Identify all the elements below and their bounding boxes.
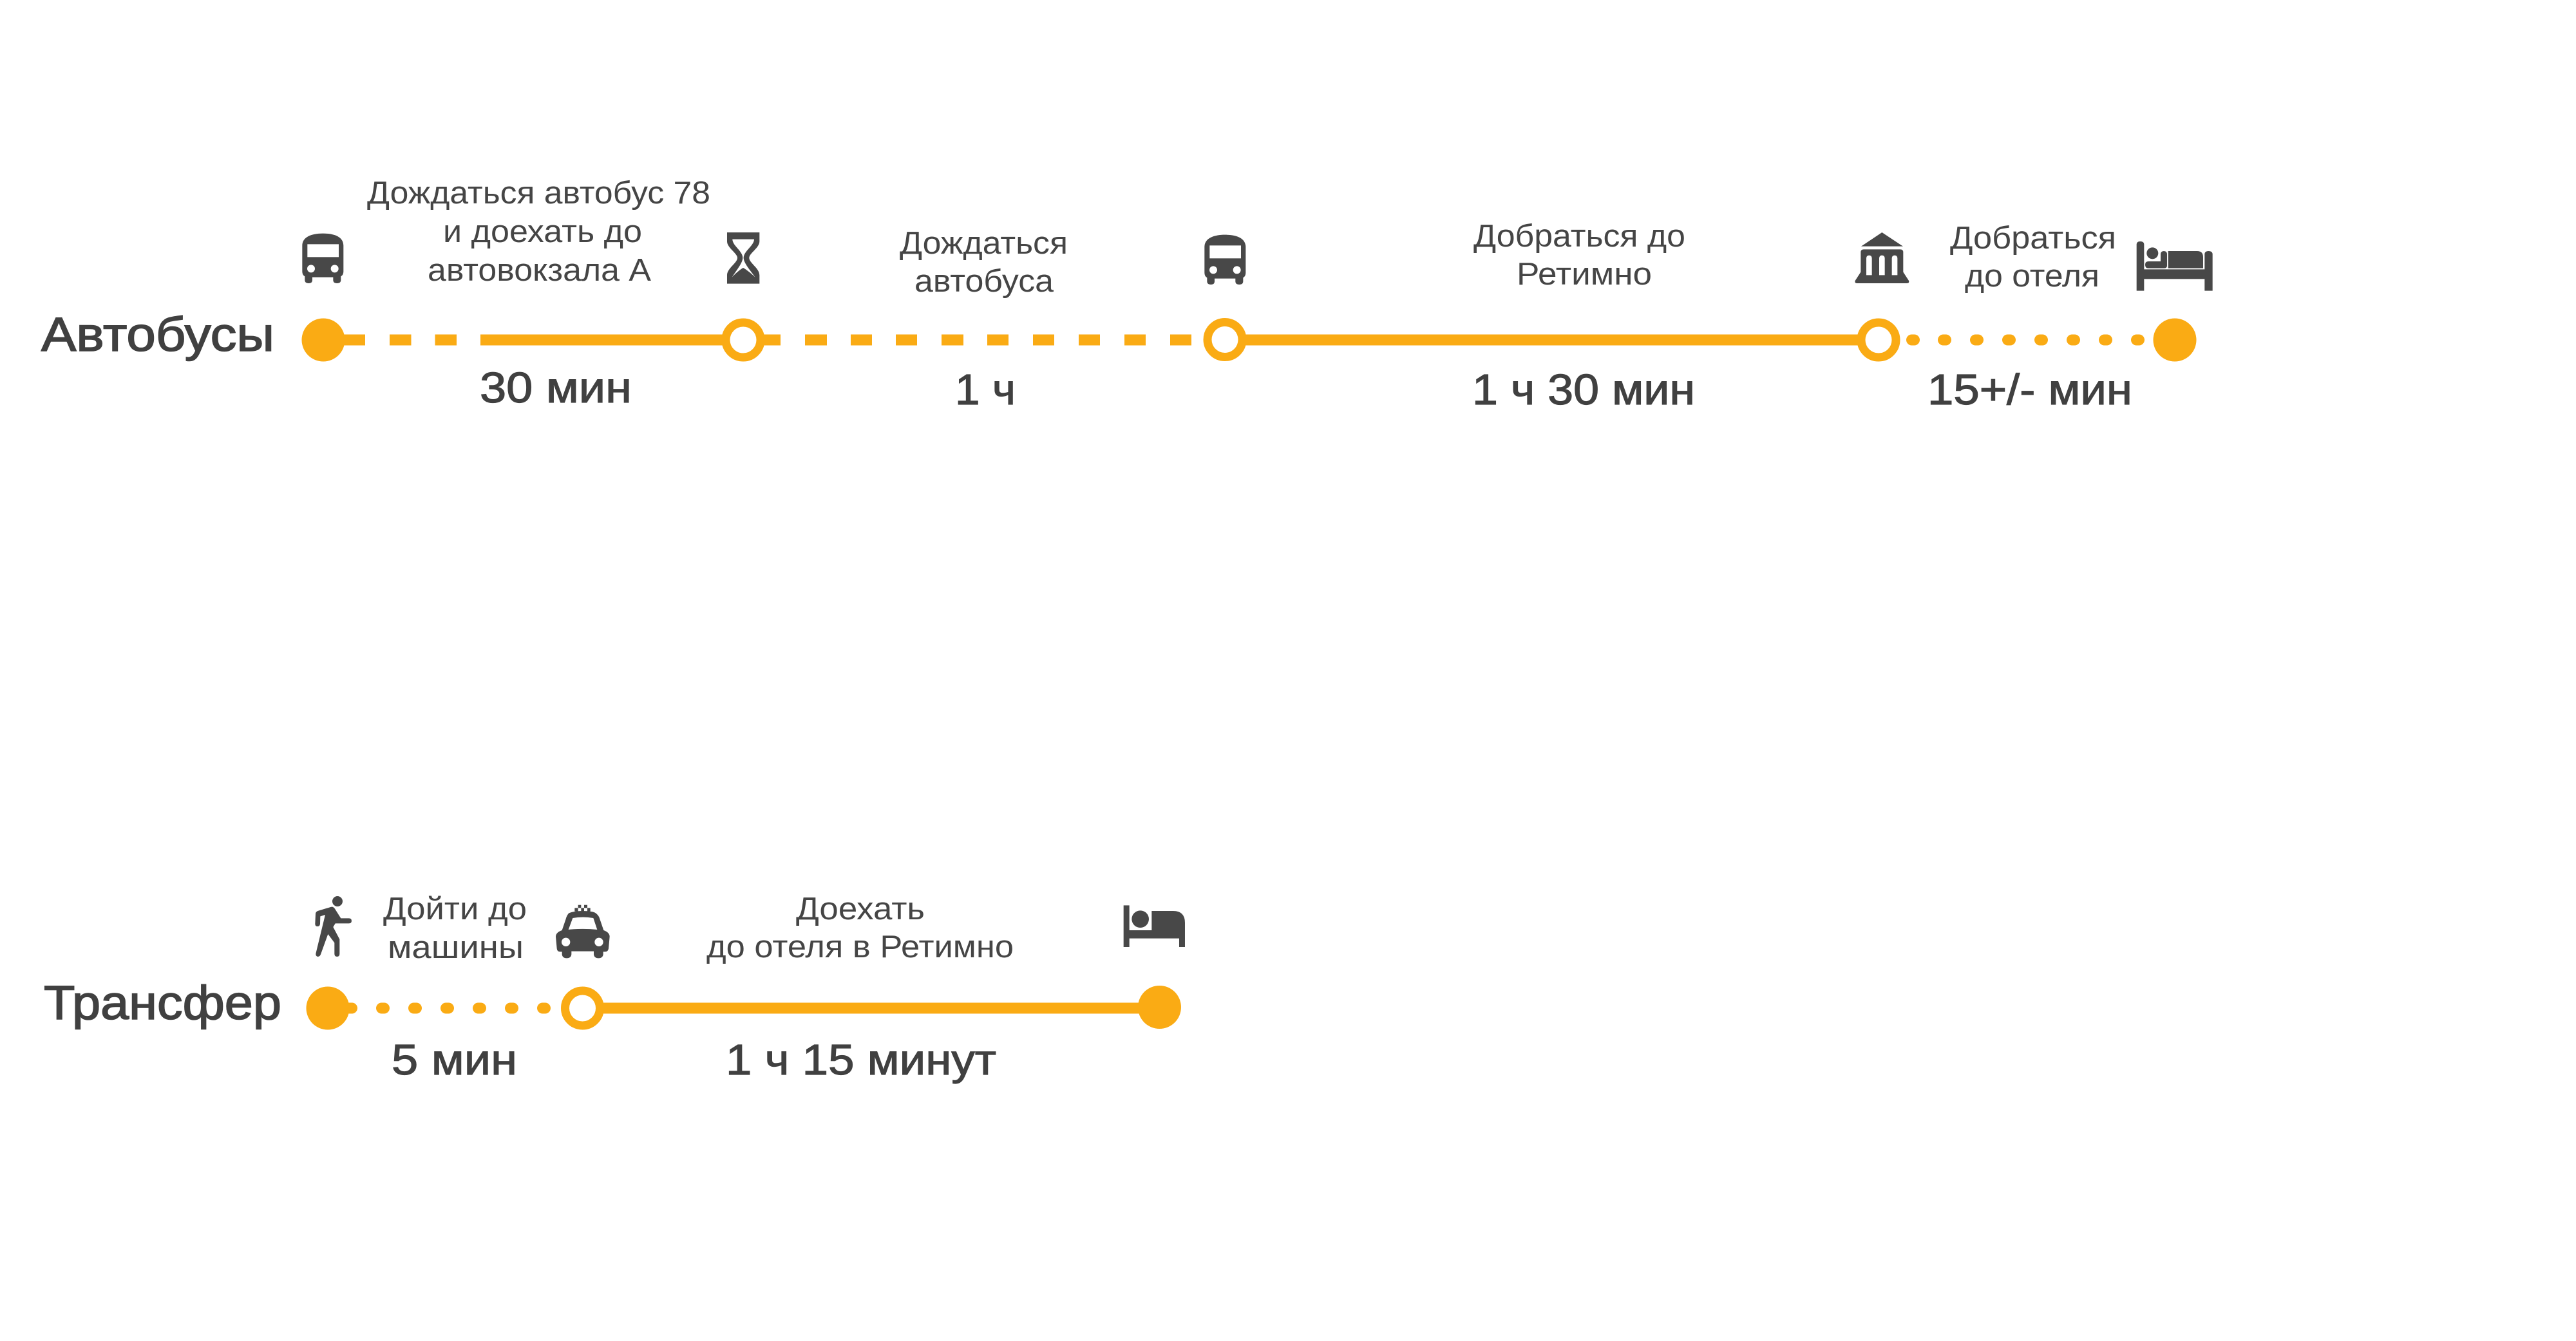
heading: transfer: Трансфер	[44, 976, 281, 1029]
panel: bus route	[41, 176, 2213, 414]
stop: bus station	[1861, 323, 1896, 357]
text: step 4 description: до отеля	[1965, 259, 2099, 294]
panel: transfer route	[44, 892, 1185, 1084]
text: step 2 description	[900, 226, 1068, 299]
heading: buses: Автобусы	[41, 308, 274, 361]
icon: bus station building	[1855, 232, 1909, 283]
text: step 2 description: автобуса	[914, 264, 1054, 299]
text: step 3 description: Добраться до	[1473, 219, 1685, 254]
route line: buses	[301, 318, 2196, 362]
stop: start	[301, 318, 345, 362]
stop: hotel	[1138, 986, 1181, 1029]
text: step 3 description	[1473, 219, 1685, 292]
text: step 1 description: и доехать до	[443, 214, 642, 249]
text: step 3 duration: 1 ч 30 мин	[1472, 366, 1695, 414]
text: step 1 description: Дождаться автобус 78	[367, 176, 710, 211]
stop: transfer 1	[726, 323, 761, 357]
text: ride description: до отеля в Ретимно	[706, 930, 1014, 964]
icon: bed	[1124, 905, 1185, 947]
icon: bus	[302, 234, 343, 283]
text: step 2 duration: 1 ч	[955, 366, 1016, 414]
icon: walking person	[315, 896, 352, 957]
text: step 1 description: автовокзала А	[428, 253, 651, 288]
icon: bed with sleeper	[2137, 241, 2213, 291]
text: ride duration: 1 ч 15 минут	[726, 1036, 996, 1084]
segment: dotted walk to hotel	[1906, 335, 2145, 345]
stop: hotel	[2154, 318, 2196, 362]
text: step 4 duration: 15+/- мин	[1927, 366, 2132, 414]
text: step 2 description: Дождаться	[900, 226, 1068, 261]
segment: dashes then solid, to first stop	[323, 335, 743, 345]
icon: taxi	[556, 905, 610, 958]
segment: dashed wait for bus	[743, 335, 1191, 345]
text: step 4 description: Добраться	[1950, 221, 2116, 256]
icon: bus	[1204, 235, 1245, 285]
text: step 4 description	[1950, 221, 2116, 294]
icon: hourglass	[727, 232, 759, 284]
stop: transfer 2	[1208, 322, 1242, 357]
text: walk description: Дойти до	[383, 892, 527, 926]
text: step 1 duration: 30 мин	[480, 364, 632, 412]
stop: car	[565, 991, 600, 1026]
text: walk duration: 5 мин	[392, 1036, 517, 1084]
segment: solid ride to Rethymno	[1225, 335, 1879, 345]
text: walk description: машины	[388, 930, 524, 965]
text: step 1 description	[367, 176, 710, 288]
text: ride description	[706, 892, 1014, 964]
text: ride description: Доехать	[796, 892, 925, 926]
segment: solid ride to hotel	[582, 1003, 1160, 1013]
stop: start	[307, 986, 349, 1030]
text: walk description	[383, 892, 527, 965]
text: step 3 description: Ретимно	[1517, 257, 1652, 292]
segment: dotted walk to car	[335, 1003, 551, 1013]
route line: transfer	[307, 986, 1181, 1030]
